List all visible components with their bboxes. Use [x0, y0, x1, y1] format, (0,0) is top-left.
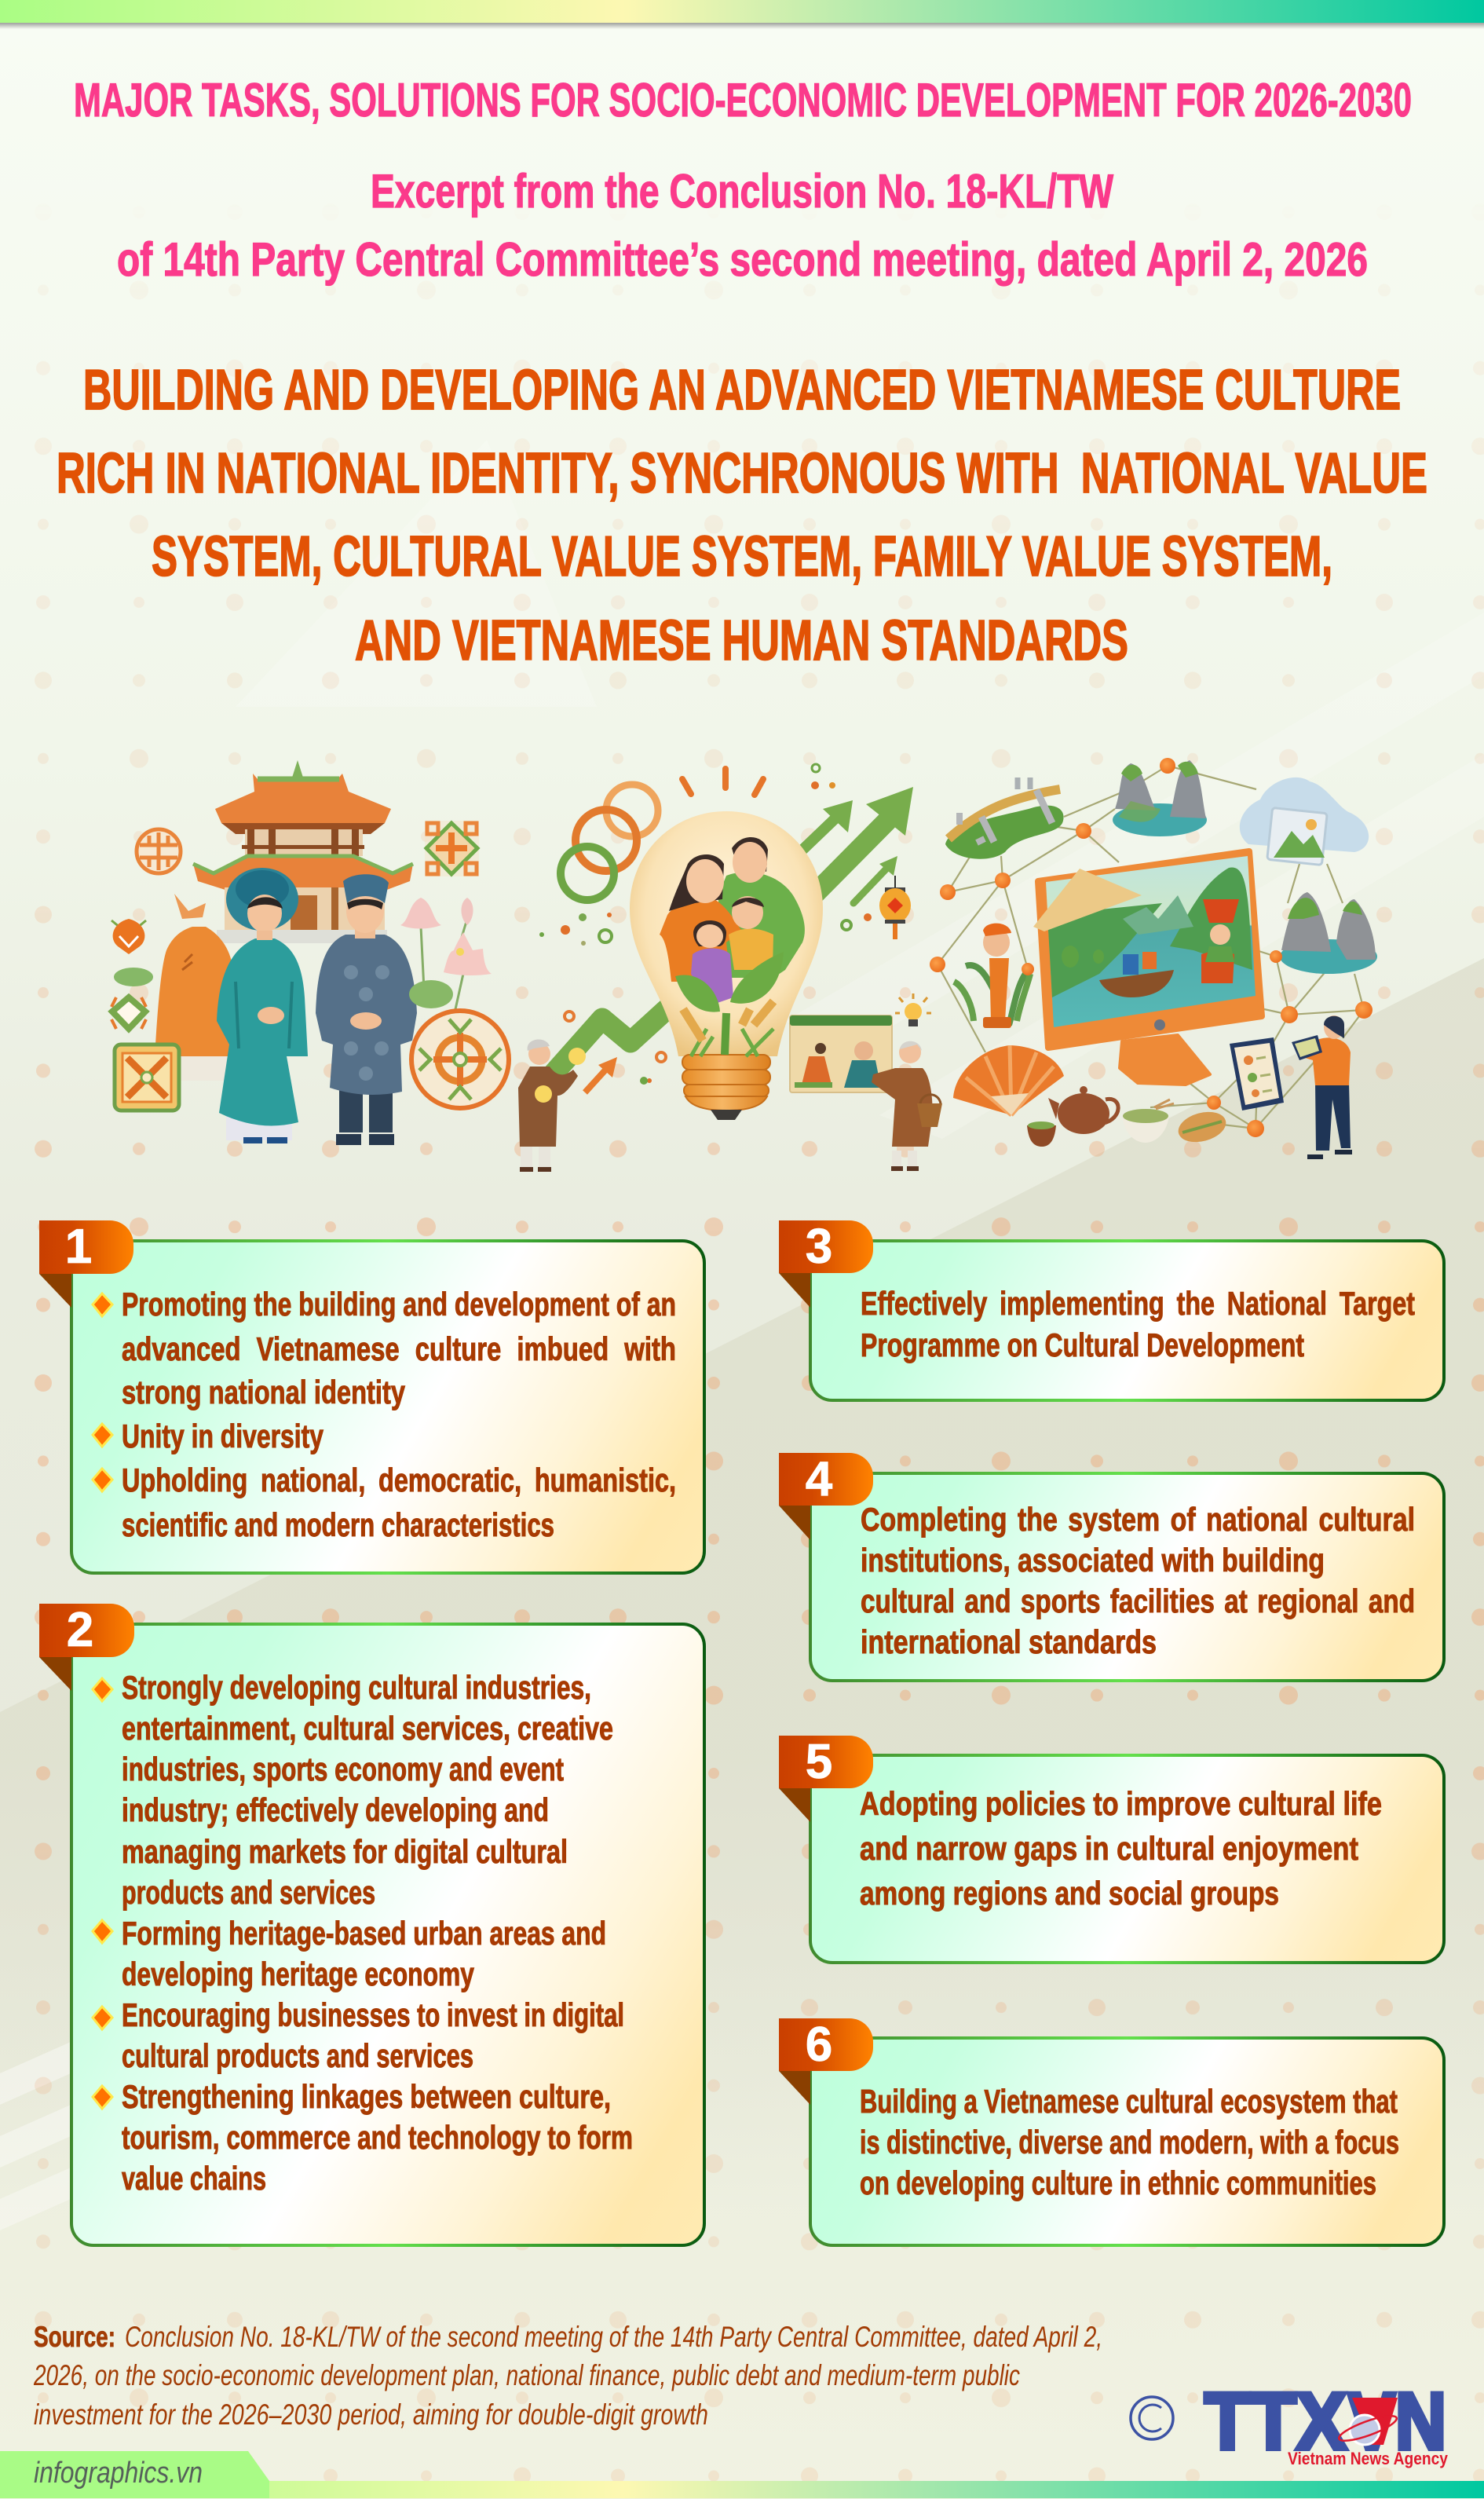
number badge 6: [779, 2018, 873, 2105]
number badge 3: 3: [806, 1220, 832, 1274]
number badge 4: [779, 1452, 873, 1540]
karst island top: [1113, 760, 1207, 836]
seedling and wheat: [675, 952, 784, 1056]
subtitle: Excerpt from the Conclusion No. 18-KL/TW: [371, 165, 1113, 218]
card 2 text: Forming heritage-based urban areas and: [122, 1915, 606, 1952]
elderly man with basket: [872, 1041, 942, 1171]
source note: [33, 2321, 1102, 2431]
card 1 text: strong national identity: [122, 1374, 405, 1410]
card 1 text: Promoting the building and development of an: [122, 1286, 676, 1323]
card 2 text: Encouraging businesses to invest in digital: [122, 1996, 624, 2033]
network links: [938, 766, 1364, 1129]
logo: TTXVN: VN: [1348, 2376, 1446, 2466]
panel background: [810, 1473, 1444, 1681]
karst island right: [1280, 892, 1377, 974]
number badge 1: [39, 1220, 133, 1308]
number badge 6: 6: [806, 2018, 832, 2072]
card 2 text: value chains: [122, 2160, 266, 2197]
card 2 text: cultural products and services: [122, 2037, 473, 2074]
main heading: AND VIETNAMESE HUMAN STANDARDS: [355, 609, 1128, 672]
orange small arrow: [585, 1057, 617, 1092]
source note: Source:: [34, 2321, 115, 2353]
logo: TTXVN: TTX: [1204, 2376, 1347, 2466]
card 3: national target programme: [779, 1220, 1444, 1400]
card 5 text: [860, 1785, 1382, 1912]
source note: investment for the 2026–2030 period, aiming for double-digit growth: [34, 2398, 708, 2431]
interlocking rings: [561, 785, 658, 900]
number badge 2: [39, 1603, 134, 1691]
number badge 2: 2: [67, 1603, 93, 1657]
woman in ao dai: [217, 868, 308, 1143]
card 2 text: managing markets for digital cultural: [122, 1833, 568, 1870]
folding fan: [953, 1045, 1064, 1115]
card 1 text: advanced Vietnamese culture imbued with: [122, 1330, 676, 1367]
main heading: [57, 359, 1427, 672]
card 3 text: [861, 1285, 1415, 1363]
panel background: [71, 1624, 704, 2245]
card 4 text: [861, 1501, 1415, 1660]
card 3 text: Programme on Cultural Development: [861, 1326, 1304, 1363]
panel background: [71, 1241, 704, 1573]
man with tablet: [1292, 1015, 1352, 1159]
card 2 text: Strengthening linkages between culture,: [122, 2078, 611, 2115]
source note: 2026, on the socio-economic development plan, national finance, public debt and medium-term public: [33, 2359, 1020, 2391]
bridge island: [945, 778, 1064, 859]
pagoda: [193, 760, 413, 943]
illustration: culture scene: [111, 758, 1377, 1172]
card 4 text: international standards: [861, 1623, 1157, 1660]
light bulb: [630, 811, 823, 1120]
card 5 text: and narrow gaps in cultural enjoyment: [860, 1830, 1358, 1867]
small decorative dots: [539, 764, 872, 1085]
elderly woman with bulbs: [518, 1039, 586, 1172]
browser window: [790, 1015, 892, 1092]
water puppet farmer: [954, 924, 1030, 1028]
rising arrows: [799, 787, 913, 903]
number badge 1: 1: [65, 1220, 92, 1274]
bottom gradient bar: [0, 2481, 1484, 2498]
number badge 5: 5: [806, 1735, 832, 1789]
lantern: [879, 876, 911, 939]
panel background: [810, 1755, 1444, 1963]
computer monitor: [1033, 851, 1262, 1085]
bulb sun rays: [682, 769, 763, 795]
card 1 text: [122, 1286, 676, 1543]
logo: TTXVN: [1204, 2376, 1449, 2468]
subtitle: [117, 165, 1368, 286]
copyright symbol: [1131, 2397, 1173, 2439]
tablet: [1230, 1037, 1284, 1110]
card 2 text: products and services: [122, 1874, 375, 1911]
logo: TTXVN: Vietnam News Agency: [1288, 2449, 1449, 2468]
card 1 text: scientific and modern characteristics: [122, 1506, 554, 1543]
bullet diamonds: [93, 1293, 112, 1491]
man in ao dai: [316, 874, 417, 1145]
orange coat: [155, 927, 233, 1081]
small bulb icon: [895, 993, 931, 1026]
source note: Conclusion No. 18-KL/TW of the second meeting of the 14th Party Central Committee, dated April 2,: [125, 2321, 1102, 2353]
bullet diamonds: [93, 1678, 112, 2109]
card 2: cultural industries: [39, 1603, 704, 2245]
number badge 4: 4: [806, 1452, 833, 1506]
card 2 text: tourism, commerce and technology to form: [122, 2119, 633, 2156]
large round motif: [411, 1011, 509, 1108]
card 1 text: Upholding national, democratic, humanistic,: [122, 1462, 676, 1498]
cloud with photo: [1240, 778, 1369, 865]
panel background: [810, 1241, 1444, 1400]
card 6 text: [860, 2083, 1399, 2201]
panel background: [810, 2038, 1444, 2245]
card 1: advanced culture: [39, 1220, 704, 1573]
number badge 5: [779, 1735, 873, 1822]
family in bulb: [660, 837, 805, 1005]
network nodes: [930, 758, 1373, 1137]
website tab: [0, 2451, 269, 2498]
card 2 text: entertainment, cultural services, creative: [122, 1710, 613, 1747]
card 6: cultural ecosystem: [779, 2018, 1444, 2245]
card 4: cultural institutions: [779, 1452, 1444, 1681]
card 2 text: Strongly developing cultural industries,: [122, 1669, 591, 1706]
teapot and cup: [1027, 1086, 1118, 1147]
bowl and sandwich: [1122, 1099, 1230, 1147]
website tab: infographics.vn: [34, 2457, 203, 2490]
top gradient bar: [0, 0, 1484, 29]
icon: round motif: [137, 829, 181, 873]
card 2 text: industry; effectively developing and: [122, 1791, 549, 1828]
card 2 text: developing heritage economy: [122, 1956, 474, 1992]
icon: square motif: [425, 821, 479, 876]
rising chart line: [553, 1001, 675, 1074]
number badge 3: [779, 1220, 873, 1308]
square tile: [115, 1045, 179, 1110]
card 5 text: among regions and social groups: [860, 1875, 1279, 1912]
card 2 text: [122, 1669, 633, 2197]
card 5: cultural enjoyment: [779, 1735, 1444, 1963]
card 5 text: Adopting policies to improve cultural life: [860, 1785, 1382, 1822]
lotus flowers: [400, 898, 492, 1009]
card 2 text: industries, sports economy and event: [122, 1751, 564, 1787]
card 1 text: Unity in diversity: [122, 1418, 323, 1454]
card 4 text: institutions, associated with building: [861, 1542, 1325, 1579]
icon: left ornaments: [111, 894, 206, 1029]
